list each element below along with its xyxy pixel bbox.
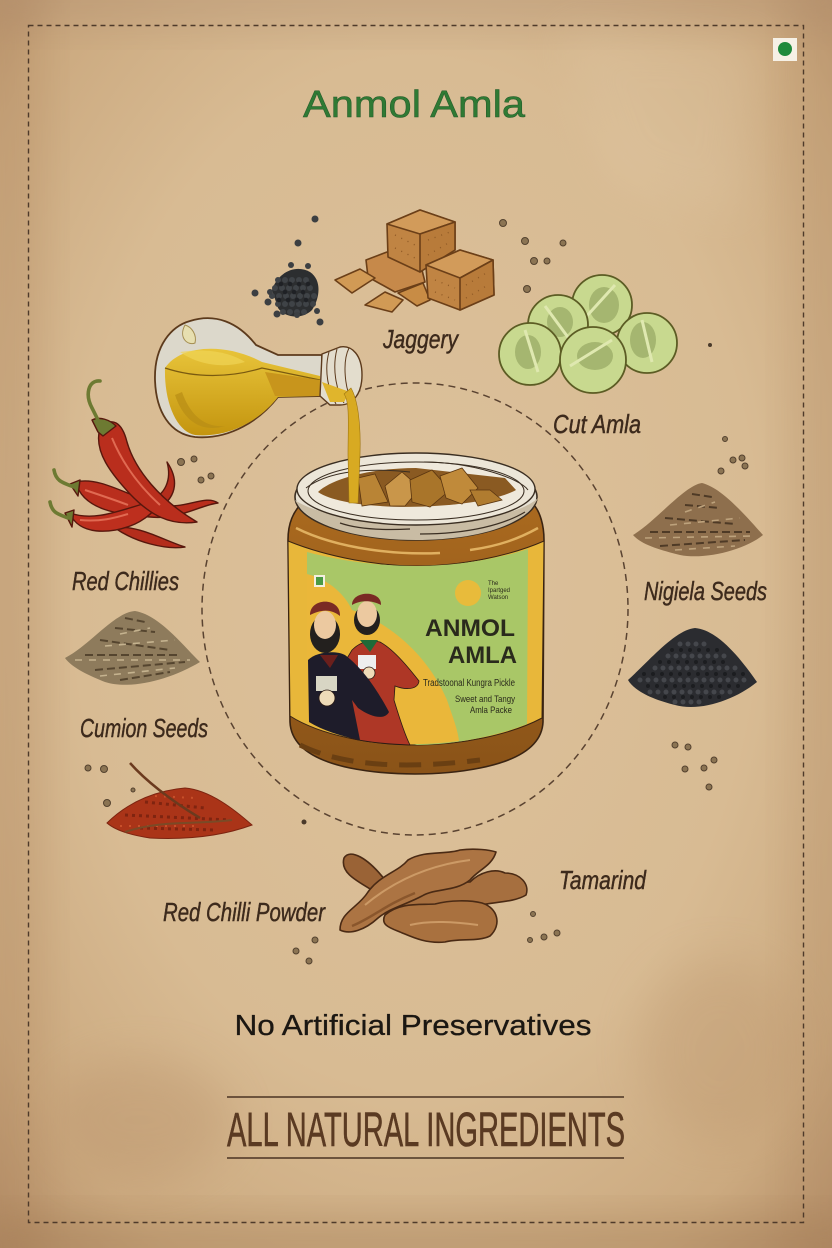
woman in black [308, 602, 389, 740]
icon: red chilli powder [107, 763, 252, 838]
speck [302, 820, 306, 824]
icon: cumin seeds pile left [65, 611, 200, 685]
product description: Tradstoonal Kungra Pickle [423, 678, 515, 689]
icon: cut amla fruits [499, 275, 677, 393]
icon: nigella seeds pile [628, 628, 757, 707]
pickle label [288, 541, 544, 745]
woman in red [340, 594, 419, 745]
brand logo: The [488, 581, 499, 587]
speck [708, 343, 712, 347]
icon: sprinkled seeds near chillies [178, 456, 214, 483]
product name: ANMOL [425, 615, 515, 642]
icon: red chillies [65, 418, 218, 548]
label: Cut Amla: Cut Amla [553, 409, 641, 439]
icon: cumin seeds pile right [633, 483, 763, 556]
veg mark on label [314, 575, 325, 587]
product name: AMLA [448, 642, 517, 669]
icon: tamarind pods [340, 849, 527, 942]
tagline: No Artificial Preservatives [234, 1010, 592, 1042]
icon: sprinkled seeds near amla [500, 220, 566, 292]
brand logo: Ipartged [488, 588, 510, 594]
icon: sprinkled seeds near nigella [672, 742, 717, 790]
product description: Sweet and Tangy [455, 694, 515, 705]
icon: jaggery cubes [335, 210, 494, 312]
brand logo: Watson [488, 595, 508, 601]
icon: chilli stems [50, 381, 100, 518]
label: Red Chilli Powder: Red Chilli Powder [163, 897, 326, 927]
product description [423, 678, 515, 716]
product name [425, 615, 517, 669]
jar with pickle [288, 388, 544, 774]
icon: sprinkled seeds near chilli powder [85, 765, 135, 806]
icon: oil bottle [155, 318, 362, 437]
icon: sprinkled seeds near tamarind [293, 912, 560, 964]
dashed circle around jar [202, 383, 628, 835]
label: Jaggery: Jaggery [382, 324, 460, 354]
icon: sprinkled seeds near cumin [718, 436, 748, 474]
title: Anmol Amla [303, 84, 526, 126]
jar rim [295, 453, 538, 540]
jar body [288, 505, 544, 774]
icon: veg mark [773, 38, 797, 61]
product description: Amla Packe [470, 705, 512, 716]
brand logo [455, 580, 510, 606]
label: Cumion Seeds: Cumion Seeds [80, 713, 208, 743]
icon: mustard seed pile [252, 216, 324, 326]
label: Tamarind: Tamarind [559, 865, 647, 895]
label: Nigiela Seeds: Nigiela Seeds [644, 576, 767, 606]
label: Red Chillies: Red Chillies [72, 566, 179, 596]
oil stream [344, 388, 360, 503]
